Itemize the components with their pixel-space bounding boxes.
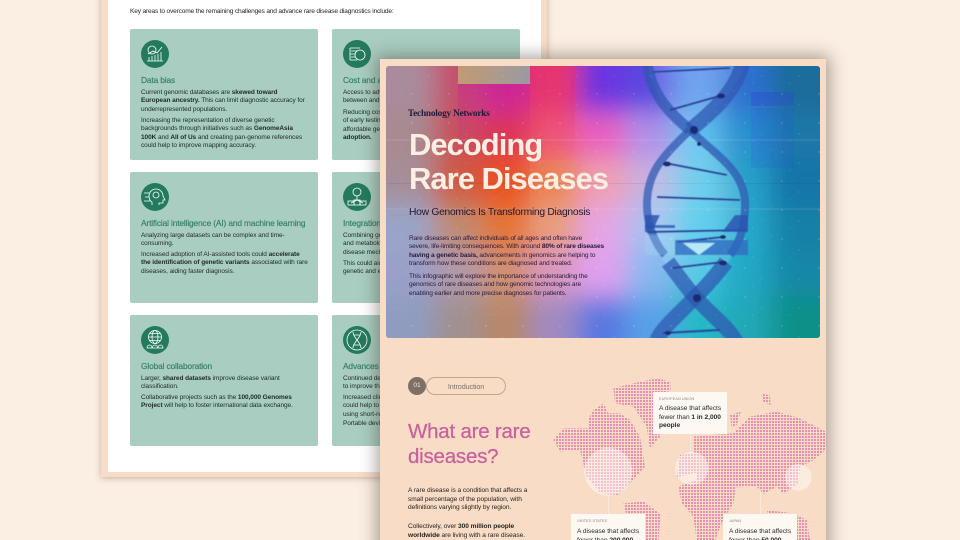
body text 2: Collaborative projects such as the 100,000 Genomes xyxy=(141,394,292,401)
glitch band over helix xyxy=(645,215,660,232)
card: global collaboration xyxy=(130,315,318,446)
body text: Continued development is needed xyxy=(343,375,440,382)
region label: JAPAN xyxy=(729,519,741,523)
body text: classification. xyxy=(141,383,179,390)
body text 2 xyxy=(141,251,308,275)
intro sentence: Key areas to overcome the remaining challenges and advance rare disease diagnostics include: xyxy=(130,8,393,15)
body text: to improve the accuracy of tests. xyxy=(343,383,434,390)
definition xyxy=(659,405,721,429)
title: Decoding xyxy=(409,127,542,162)
pill label xyxy=(426,377,506,395)
pill label: Introduction xyxy=(448,382,484,391)
intro paragraph 2: Collectively, over 300 million people xyxy=(408,523,514,530)
callout: United States xyxy=(571,514,645,540)
definition: A disease that affects xyxy=(577,528,639,535)
body text 2: Increased adoption of AI-assisted tools could accelerate xyxy=(141,251,300,258)
body text 2: diseases, aiding faster diagnosis. xyxy=(141,268,234,275)
logo: Technology Networks: Technology Networks xyxy=(408,108,490,118)
section badge: 01 Introduction xyxy=(408,377,506,395)
body text 2: Increasing the representation of diverse genetic xyxy=(141,117,275,124)
body text xyxy=(141,232,285,247)
body text: Combining genomics with transcriptomics xyxy=(343,232,460,239)
helix rungs xyxy=(647,68,747,333)
body text xyxy=(343,375,440,390)
icon: AI head xyxy=(141,183,169,211)
section heading xyxy=(408,420,530,468)
subtitle: How Genomics Is Transforming Diagnosis xyxy=(409,207,590,218)
intro paragraph: definitions varying slightly by region. xyxy=(408,504,511,511)
helix ribbons xyxy=(647,60,745,345)
definition: A disease that affects xyxy=(729,528,791,535)
highlight: United States xyxy=(584,448,632,496)
body text: disease mechanisms. xyxy=(343,249,404,256)
body text 2: Reducing costs and increasing access xyxy=(343,109,451,116)
region label: EUROPEAN UNION xyxy=(659,397,694,401)
callout: European Union xyxy=(653,392,727,434)
card: advances in sequencing xyxy=(332,315,520,446)
hero paragraph 1: having a genetic basis, advancements in genomics are helping to xyxy=(409,252,595,259)
hero banner xyxy=(386,66,820,338)
title xyxy=(409,127,608,196)
definition xyxy=(577,528,639,540)
heading: Data bias xyxy=(141,75,175,85)
body text 2: backgrounds through initiatives such as GenomeAsia xyxy=(141,125,293,132)
highlight: European Union xyxy=(675,452,708,485)
card: data bias xyxy=(130,29,318,160)
body text 2: of early testing could help to support xyxy=(343,117,445,124)
body text xyxy=(343,232,460,256)
hero artwork: gradient, glitch blocks and DNA helix xyxy=(386,66,820,338)
heading: Integration of multiomics xyxy=(343,218,430,228)
body text 2: This could aid understanding of xyxy=(343,260,431,267)
card: integration xyxy=(332,172,520,303)
body text 2: affordable genomics and wider xyxy=(343,126,429,133)
intro paragraph xyxy=(408,487,528,511)
intro paragraph 2: worldwide are living with a rare disease. xyxy=(408,532,525,538)
body text xyxy=(141,89,305,113)
icon: coins xyxy=(343,40,371,68)
helix nodes xyxy=(663,94,727,335)
body text 2 xyxy=(141,394,293,409)
hero paragraph 2: This infographic will explore the importance of understanding the xyxy=(409,273,588,280)
title: Rare Diseases xyxy=(409,160,608,196)
region label: UNITED STATES xyxy=(577,519,607,523)
body text 2: could help to resolve gaps left by xyxy=(343,402,435,409)
definition xyxy=(729,528,791,540)
intro paragraph: A rare disease is a condition that affects a xyxy=(408,487,527,494)
heading: Cost and access xyxy=(343,75,403,85)
icon: data chart xyxy=(141,40,169,68)
body text: European ancestry. This can limit diagnostic accuracy for xyxy=(141,97,305,104)
icon: globe and people xyxy=(141,326,169,354)
heading: Artificial intelligence (AI) and machine learning xyxy=(141,218,305,228)
highlight: Japan xyxy=(785,464,812,491)
body text: Current genomic databases are skewed toward xyxy=(141,89,277,96)
body text 2 xyxy=(141,117,302,149)
panel: back page xyxy=(101,0,547,477)
number badge xyxy=(408,377,426,395)
body text: Larger, shared datasets improve disease variant xyxy=(141,375,280,382)
card: artificial intelligence xyxy=(130,172,318,303)
hero paragraph 1 xyxy=(409,235,604,267)
heading: Global collaboration xyxy=(141,361,212,371)
body text 2: genetic and environmental factors. xyxy=(343,268,440,275)
number badge: 01 xyxy=(413,382,421,389)
icon: DNA ring xyxy=(343,326,371,354)
body text: and metabolomics could reveal further xyxy=(343,240,451,247)
body text 2 xyxy=(343,394,442,418)
body text: between and within countries. xyxy=(343,97,427,104)
body text 2: the identification of genetic variants associated with rare xyxy=(141,259,308,266)
body text 2: adoption. xyxy=(343,134,372,141)
section heading: diseases? xyxy=(408,445,498,468)
body text 2 xyxy=(343,109,451,141)
callout: Japan xyxy=(723,514,797,540)
section heading: What are rare xyxy=(408,420,530,443)
body text 2: Project will help to foster international data exchange. xyxy=(141,402,293,409)
hero paragraph 1: transform how these conditions are diagnosed and treated. xyxy=(409,260,572,267)
intro paragraph 2 xyxy=(408,523,525,538)
body text 2: 100K and All of Us and creating pan-genome references xyxy=(141,134,302,141)
definition: people xyxy=(659,422,680,429)
card: cost and access xyxy=(332,29,520,160)
hero paragraph 2: enabling earlier and more precise diagnoses for patients. xyxy=(409,290,566,297)
body text 3: Portable devices could widen access. xyxy=(343,420,449,427)
hero paragraph 1: severe, life-limiting consequences. With around 80% of rare diseases xyxy=(409,243,604,250)
body text 2: Increased clinical use of long-reads xyxy=(343,394,442,401)
hero paragraph 1: Rare diseases can affect individuals of all ages and often have xyxy=(409,235,582,242)
glitch blocks xyxy=(458,66,530,84)
definition: A disease that affects xyxy=(659,405,721,412)
body text 2 xyxy=(343,260,440,275)
body text xyxy=(343,89,439,104)
body text: Access to advanced testing varies xyxy=(343,89,439,96)
helix interior xyxy=(648,60,745,130)
definition: fewer than 1 in 2,000 xyxy=(659,414,721,420)
intro paragraph: small percentage of the population, with xyxy=(408,496,522,502)
hero paragraph 2 xyxy=(409,273,588,297)
heading: Advances in sequencing xyxy=(343,361,430,371)
body text: underrepresented populations. xyxy=(141,106,227,113)
body text 2: could help to improve mapping accuracy. xyxy=(141,142,256,149)
hero paragraph 2: genomics of rare diseases and how genomic technologies are xyxy=(409,281,581,288)
icon: network xyxy=(343,183,371,211)
body text 2: using short-read technologies. xyxy=(343,411,428,418)
panel: front page xyxy=(380,59,826,540)
body text: Analyzing large datasets can be complex and time- xyxy=(141,232,285,239)
body text xyxy=(141,375,280,390)
dotted world map xyxy=(554,379,825,540)
body text: consuming. xyxy=(141,240,174,247)
